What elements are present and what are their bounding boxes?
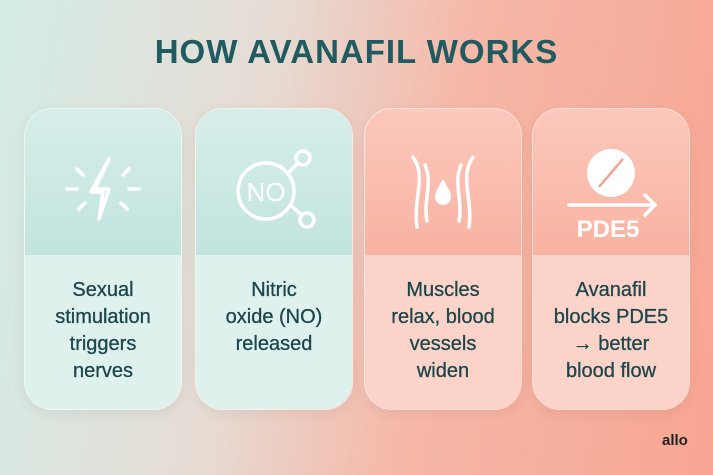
icon: NO molecule: NO: [246, 177, 286, 207]
text: step 1: nerves: [73, 360, 133, 382]
text: step 1: Sexual: [72, 279, 134, 301]
panel: step 3: [364, 108, 522, 410]
logo: allo: [662, 432, 688, 449]
panel: step 2: [195, 108, 353, 410]
text: step 4: blocks PDE5: [554, 306, 668, 328]
text: step 2: oxide (NO): [226, 306, 322, 328]
text: step 3: relax, blood: [391, 306, 495, 328]
text: step 4: Avanafil: [576, 279, 646, 301]
text: step 4: [533, 255, 689, 409]
icon: vessels: [365, 109, 521, 255]
panel: step 4: [532, 108, 690, 410]
text: step 3: [365, 255, 521, 409]
icon: pill blocking PDE5: PDE5: [577, 216, 639, 243]
text: step 4: blood flow: [566, 360, 656, 382]
text: step 1: triggers: [70, 333, 136, 355]
text: step 3: widen: [417, 360, 469, 382]
text: step 2: released: [236, 333, 312, 355]
icon: pill blocking PDE5: [533, 109, 689, 255]
text: step 1: [25, 255, 181, 409]
text: step 4: → better: [573, 333, 649, 355]
text: step 2: [196, 255, 352, 409]
text: step 2: Nitric: [251, 279, 297, 301]
icon: lightning: [25, 109, 181, 255]
panel: step 1: [24, 108, 182, 410]
title: HOW AVANAFIL WORKS: [155, 33, 558, 70]
icon: NO molecule: [196, 109, 352, 255]
text: step 3: vessels: [410, 333, 476, 355]
text: step 3: Muscles: [406, 279, 480, 301]
text: step 1: stimulation: [55, 306, 151, 328]
